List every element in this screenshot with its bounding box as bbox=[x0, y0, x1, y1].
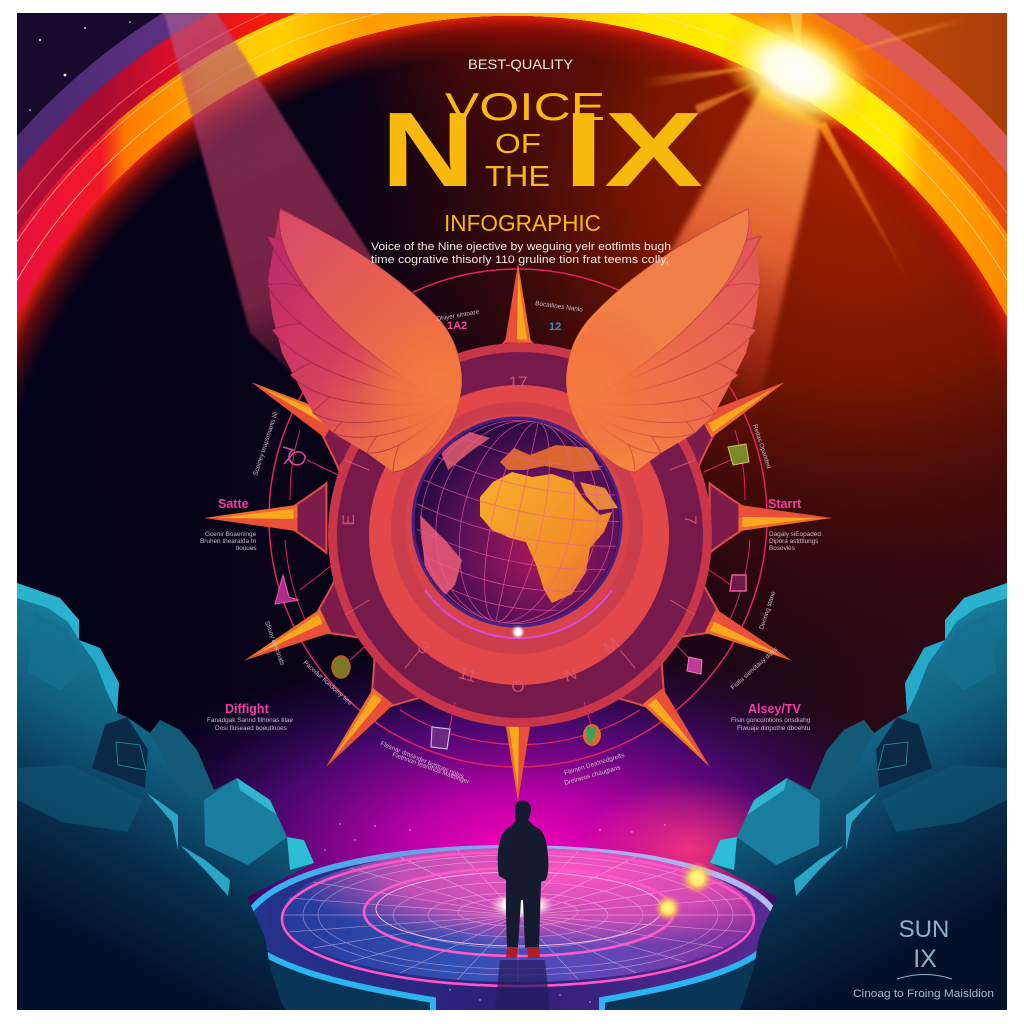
continent: south america bbox=[420, 515, 462, 600]
label: Starrt: Dipora astittiungs bbox=[769, 538, 818, 545]
segment labels bbox=[200, 300, 821, 787]
label: Diffight: Diffight bbox=[225, 702, 270, 716]
label: Starrt: Starrt bbox=[768, 497, 802, 511]
label: Satte bbox=[200, 497, 257, 552]
compass spikes bbox=[204, 263, 832, 801]
kicker: BEST-QUALITY bbox=[468, 56, 574, 72]
dial inner pink ring bbox=[364, 868, 674, 956]
label: Satte: Bruhen thearalda tn bbox=[200, 538, 257, 545]
label: Alsey/TV bbox=[731, 702, 811, 732]
band glyphs: 3 bbox=[414, 637, 433, 658]
sun with rays bbox=[640, 0, 968, 296]
header text bbox=[371, 56, 703, 266]
band glyphs: 7 bbox=[681, 515, 700, 525]
curved side notes: Sceiney teapsmiants lili bbox=[252, 411, 279, 477]
top number 1a2: 1A2 bbox=[447, 320, 467, 332]
orb two bbox=[654, 894, 682, 922]
title: VOICE: VOICE bbox=[445, 86, 605, 129]
continent: north land bbox=[440, 432, 490, 470]
icon: food pack bbox=[332, 656, 350, 678]
subtitle: INFOGRAPHIC bbox=[444, 210, 601, 236]
left wing bbox=[267, 208, 462, 472]
floor sparkles bbox=[309, 823, 666, 1003]
description: Voice of the Nine ojective by weguing yelr eotfimts bugh bbox=[371, 241, 671, 253]
label: Satte: Gcenir Boaeninge bbox=[205, 531, 257, 538]
label: Starrt: Bosovies bbox=[769, 545, 795, 552]
curved side notes: Bocatlines Nanlo bbox=[535, 300, 584, 314]
icon: green book bbox=[728, 444, 749, 465]
globe grid bbox=[416, 420, 619, 624]
label: Alsey/TV: Fiwuaje dinpothe dboehtu bbox=[737, 725, 811, 732]
curved side notes bbox=[252, 300, 779, 787]
label: Diffight: Fanadgak Sannd filhonas tilae bbox=[207, 717, 293, 724]
band glyphs: 11 bbox=[456, 663, 478, 686]
icon: ball bbox=[583, 724, 601, 746]
platform top rim bbox=[246, 848, 778, 918]
band glyphs: N bbox=[562, 664, 579, 685]
brand SUN: SUN bbox=[899, 916, 949, 943]
gear salmon ring bbox=[369, 385, 669, 685]
band glyphs bbox=[339, 373, 700, 696]
globe collar bbox=[391, 402, 643, 654]
platform bbox=[246, 848, 778, 1010]
side rim glow bbox=[246, 918, 778, 952]
bottom spark bbox=[513, 627, 523, 637]
label: Alsey/TV: Fisin goncomtions onsdiahg bbox=[731, 717, 811, 724]
platform base right bbox=[602, 950, 770, 1010]
label: Satte: tiouues bbox=[236, 545, 257, 552]
description bbox=[371, 241, 671, 266]
left light beam bbox=[164, 13, 380, 373]
label: Satte: Satte bbox=[218, 497, 249, 511]
title: THE: THE bbox=[485, 161, 550, 193]
body bbox=[498, 800, 548, 948]
icon: pink box bbox=[687, 657, 702, 674]
platform bottom rim left bbox=[262, 952, 433, 1010]
title: IX: IX bbox=[563, 91, 703, 209]
floor magenta glow bbox=[188, 665, 843, 1010]
orb one bbox=[680, 861, 714, 895]
curved side notes: Fiethnon feanthos Matuinger bbox=[391, 751, 471, 786]
brand tagline: Cinoag to Froing Maisldion bbox=[853, 988, 994, 1000]
sky right corner bbox=[814, 13, 1007, 174]
curved side notes: Dreinwos chaugtans bbox=[564, 764, 621, 787]
bottom glow arc bbox=[425, 590, 612, 638]
sky rainbow arc bbox=[17, 13, 1007, 318]
curved side notes: Sfiuoy doscinats bbox=[263, 620, 286, 666]
curved side notes: Deoring stane bbox=[758, 590, 777, 631]
curved side notes: Dhiyer sintoare bbox=[436, 309, 480, 323]
band glyphs: E bbox=[339, 514, 358, 526]
curved side notes: Flesnar dmsinder bostuer ngles bbox=[379, 740, 465, 780]
title: OF: OF bbox=[495, 128, 541, 159]
gear dark band bbox=[337, 352, 703, 718]
outer thin pink ring bbox=[269, 269, 767, 767]
right rocks bbox=[710, 583, 1007, 1010]
label: Diffight bbox=[207, 702, 293, 732]
dial grid bbox=[281, 848, 755, 982]
glow at feet bbox=[490, 892, 554, 918]
label: Diffight: Dosi fluseaed boeutlnoes bbox=[215, 725, 287, 732]
icon: tablet bbox=[431, 727, 450, 749]
label: Alsey/TV: Alsey/TV bbox=[748, 702, 801, 716]
dial second ring bbox=[376, 872, 662, 946]
platform floor bbox=[250, 848, 778, 1010]
right wing bbox=[566, 208, 762, 472]
right shoe bbox=[527, 947, 540, 958]
dial disc bbox=[281, 848, 755, 982]
curved side notes: Fitimen Deatnedgrelts bbox=[564, 752, 625, 777]
dial pink wash bbox=[281, 848, 755, 982]
platform bottom rim right bbox=[602, 952, 760, 1010]
person standing bbox=[498, 800, 548, 958]
description: time cogrative thisorly 110 gruline tion frat teems colly, bbox=[371, 254, 669, 266]
horizon red glow bbox=[598, 784, 768, 896]
dial outer pink ring bbox=[282, 852, 754, 986]
reflection under person bbox=[495, 960, 550, 1010]
continent: europe bbox=[500, 445, 600, 472]
right light beam bbox=[664, 87, 824, 408]
segment icons bbox=[275, 444, 749, 749]
band tick marks bbox=[345, 460, 695, 668]
dark dome interior bbox=[17, 16, 1007, 596]
icon: left upper bbox=[283, 447, 305, 465]
curved side notes: Fistlu sienotauy datrs bbox=[730, 646, 779, 691]
label: Starrt bbox=[768, 497, 821, 552]
starry sky left corner bbox=[17, 13, 162, 136]
gear outer rim bbox=[328, 343, 712, 727]
globe bbox=[412, 416, 622, 628]
left shoe bbox=[506, 947, 518, 958]
band glyphs: O bbox=[511, 677, 525, 696]
brand mark bbox=[853, 916, 994, 1000]
icon: red page bbox=[730, 575, 746, 591]
left rocks bbox=[17, 583, 314, 1010]
connector lines bbox=[300, 458, 735, 735]
brand IX: IX bbox=[913, 945, 937, 973]
label: Starrt: Dagaly siEopaded bbox=[769, 531, 821, 538]
band glyphs: 17 bbox=[509, 373, 527, 392]
brand swoosh bbox=[897, 974, 952, 979]
title: N: N bbox=[381, 91, 475, 209]
icon: left lower bbox=[275, 575, 299, 604]
curved side notes: Reitas Opanded bbox=[751, 423, 772, 470]
continent: arabia bbox=[580, 482, 618, 510]
compass ring diagram bbox=[200, 208, 832, 801]
top number 12: 12 bbox=[549, 321, 561, 333]
curved side notes: Pacedur fiondoiny ties bbox=[302, 659, 353, 707]
collar highlight bbox=[405, 414, 629, 638]
continent: africa bbox=[480, 472, 612, 603]
platform base left bbox=[255, 950, 433, 1010]
band glyphs: M bbox=[600, 634, 623, 658]
